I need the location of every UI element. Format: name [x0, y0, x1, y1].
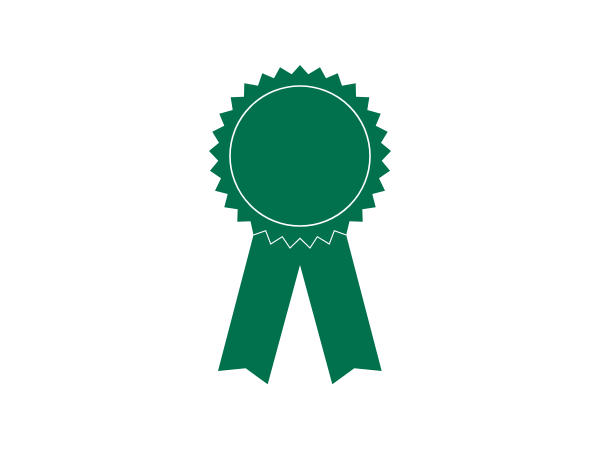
right ribbon tail	[300, 228, 382, 384]
rosette starburst	[209, 65, 391, 248]
rosette scalloped edge line	[254, 231, 346, 248]
left ribbon tail	[218, 228, 300, 384]
rosette inner circle	[230, 86, 370, 226]
